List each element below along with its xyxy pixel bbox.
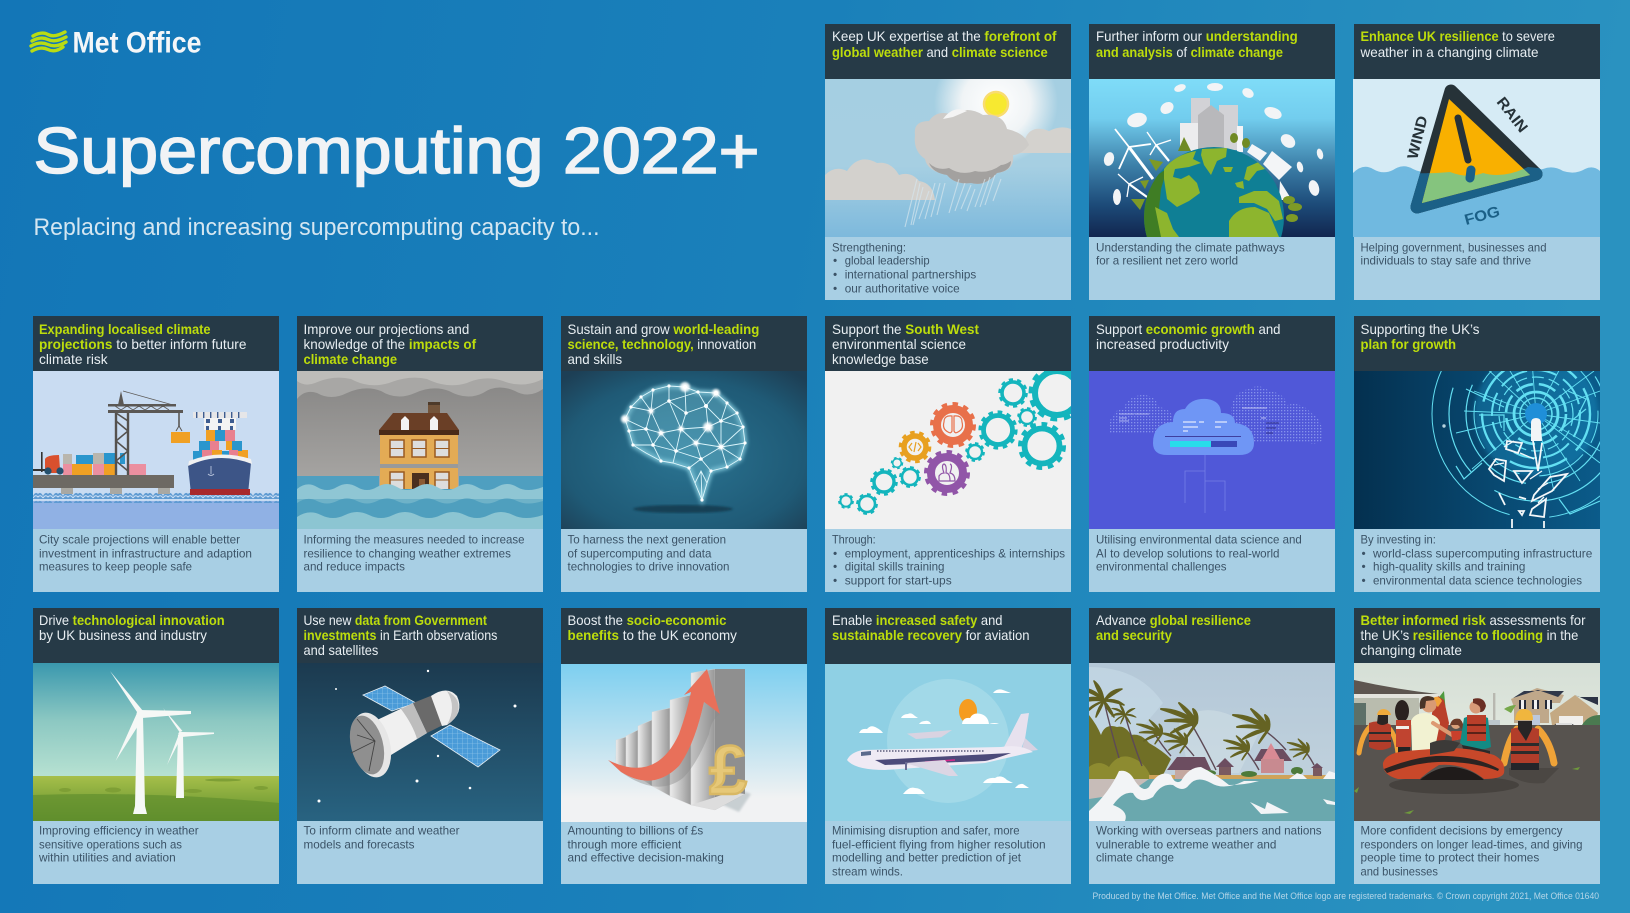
heading: climate risk [39,351,109,367]
body text [39,532,252,574]
heading [568,321,759,367]
body text: • [1362,560,1366,574]
heading [1360,612,1586,658]
body text [1360,824,1582,878]
heading: environmental science [832,336,966,352]
body text: global leadership [845,254,930,268]
illustration: warning sign in water: WIND [1404,114,1432,161]
illustration: flooded house [297,371,543,529]
heading: science, technology, innovation [568,336,756,352]
body text: More confident decisions by emergency [1360,824,1562,838]
icon: logo waves [31,32,66,51]
heading: Support economic growth and [1096,321,1280,337]
body text: international partnerships [845,268,976,282]
heading: Drive technological innovation [39,612,225,628]
body text [832,824,1046,878]
body text: • [1362,574,1366,588]
panel: UK resilience [1353,24,1600,300]
logo: Met Office [31,26,202,60]
illustration: finger touching digital rings [1354,371,1600,529]
illustration: wind turbines [33,663,279,821]
heading: global weather and climate science [832,44,1048,60]
panel: understanding climate change [1089,24,1335,300]
heading: Expanding localised climate [39,321,211,337]
heading: Advance global resilience [1096,612,1251,628]
panel: technological innovation [33,608,279,884]
illustration: port with ship [33,371,279,529]
body text [1360,240,1546,268]
heading [568,612,737,643]
heading: Improve our projections and [304,321,469,337]
heading: investments in Earth observations [304,627,497,643]
panel: global resilience [1080,608,1335,884]
body text: climate change [1096,850,1174,864]
heading: and satellites [304,642,378,658]
body text [568,824,724,864]
panel: impacts of climate change [297,316,543,592]
body text: By investing in: [1360,532,1436,546]
body text [1360,532,1593,588]
heading: Keep UK expertise at the forefront of [832,28,1057,44]
body text: and effective decision-making [568,850,724,864]
illustration: sun, clouds and rain [825,79,1071,237]
body text [832,532,1065,588]
panel: forefront of science [825,24,1071,300]
body text: stream winds. [832,864,903,878]
heading [832,612,1030,643]
panel: localised climate projections [33,316,279,592]
body text: • [833,574,837,588]
footer credit: Produced by the Met Office. Met Office and the Met Office logo are registered trademarks. © Crown copyright 2021, Met Office 01640 [1092,891,1599,901]
panel: economic growth [1089,316,1335,592]
heading [39,612,225,643]
illustration: storm at tropical coast [1089,663,1335,821]
body text [1096,532,1302,574]
heading [832,321,979,367]
body text: AI to develop solutions to real-world [1096,546,1280,560]
illustration: flood rescue boat [1354,663,1600,821]
heading: Use new data from Government [304,612,487,628]
panel: aviation safety [825,608,1071,884]
body text: environmental data science technologies [1373,574,1582,588]
heading: knowledge base [832,351,929,367]
heading [1096,321,1280,352]
body text: • [1362,546,1366,560]
heading [304,321,476,367]
body text: investment in infrastructure and adaption [39,546,252,560]
heading: Enhance UK resilience to severe [1360,28,1555,44]
body text: • [833,560,837,574]
body text [568,532,730,574]
body text: vulnerable to extreme weather and [1096,838,1276,852]
body text: of supercomputing and data [568,546,712,560]
body text: sensitive operations such as [39,838,182,852]
body text: through more efficient [568,838,682,852]
panel: data from Government [297,608,543,884]
illustration: gears [825,371,1071,529]
body text: fuel-efficient flying from higher resolution [832,838,1046,852]
body text: Utilising environmental data science and [1096,532,1302,546]
body text: To harness the next generation [568,532,726,546]
body text: models and forecasts [304,838,414,852]
body text [304,824,460,852]
body text: Understanding the climate pathways [1096,240,1285,254]
body text: To inform climate and weather [304,824,460,838]
heading: Further inform our understanding [1096,28,1298,44]
illustration: rising bar chart with pound [561,664,807,822]
panel: science and technology [561,316,807,592]
body text: within utilities and aviation [38,850,176,864]
body text: measures to keep people safe [39,560,192,574]
body text: for a resilient net zero world [1096,254,1238,268]
body text: world-class supercomputing infrastructure [1372,546,1593,560]
panel: socio-economic benefits [561,608,807,884]
heading: changing climate [1360,642,1462,658]
body text: • [833,282,837,296]
body text: and businesses [1360,864,1438,878]
illustration: warning sign in water: RAIN [1493,94,1531,136]
heading: and skills [568,351,622,367]
heading [832,28,1057,60]
illustration: earth with city and turbines [1089,79,1335,237]
heading: Support the South West [832,321,979,337]
body text [304,532,525,574]
subtitle: Replacing and increasing supercomputing capacity to... [34,214,600,241]
heading: projections to better inform future [39,336,247,352]
heading: Enable increased safety and [832,612,1002,628]
body text: modelling and better prediction of jet [832,850,1022,864]
body text: digital skills training [845,560,944,574]
heading: knowledge of the impacts of [304,336,476,352]
heading: and analysis of climate change [1096,44,1283,60]
panel: plan for growth [1354,310,1630,592]
body text: our authoritative voice [845,282,960,296]
heading [304,612,497,658]
heading: increased productivity [1096,336,1229,352]
heading: Boost the socio-economic [568,612,727,628]
illustration: rising bar chart with pound: £ [709,731,747,809]
body text: support for start-ups [845,574,952,588]
body text: technologies to drive innovation [568,560,730,574]
illustration: data cloud [1089,371,1335,529]
heading: benefits to the UK economy [568,627,737,643]
body text: people time to protect their homes [1360,850,1539,864]
illustration: aeroplane [825,664,1071,821]
title: Supercomputing 2022+ [34,114,760,187]
illustration: satellite [297,663,543,821]
body text: individuals to stay safe and thrive [1360,254,1531,268]
body text: resilience to changing weather extremes [304,546,511,560]
body text [38,824,199,864]
body text: City scale projections will enable better [39,532,240,546]
body text: Informing the measures needed to increase [304,532,525,546]
body text: • [833,268,837,282]
illustration: glowing network brain [561,371,807,529]
body text: • [833,254,837,268]
heading [1360,28,1555,60]
logo wordmark: Met Office [72,26,202,60]
panel: flood risk assessments [1354,608,1600,884]
heading: Better informed risk assessments for [1360,612,1586,628]
body text: Helping government, businesses and [1360,240,1546,254]
body text: responders on longer lead-times, and giving [1360,838,1582,852]
body text: Through: [832,532,876,546]
heading: climate change [304,351,397,367]
heading: plan for growth [1360,336,1456,352]
heading [1096,28,1298,60]
body text: and reduce impacts [304,560,405,574]
panel: South West knowledge base [825,316,1083,592]
body text: environmental challenges [1096,560,1226,574]
body text: high-quality skills and training [1373,560,1525,574]
heading [1360,321,1480,352]
heading: sustainable recovery for aviation [832,627,1030,643]
body text [1096,240,1285,268]
heading [39,321,247,367]
heading: Sustain and grow world-leading [568,321,759,337]
heading: the UK’s resilience to flooding in the [1360,627,1578,643]
body text: • [833,546,837,560]
body text [1096,824,1322,864]
body text [832,240,976,296]
illustration: warning sign in water: FOG [1463,203,1502,229]
heading: and security [1096,627,1172,643]
body text: Amounting to billions of £s [568,824,703,838]
body text: employment, apprenticeships & internships [845,546,1065,560]
body text: Minimising disruption and safer, more [832,824,1020,838]
heading [1096,612,1251,643]
body text: Strengthening: [832,240,906,254]
heading: weather in a changing climate [1360,44,1539,60]
heading: by UK business and industry [39,627,207,643]
illustration: warning sign in water [1353,79,1600,237]
body text: Improving efficiency in weather [39,824,199,838]
heading: Supporting the UK’s [1360,321,1480,337]
body text: Working with overseas partners and nations [1096,824,1322,838]
